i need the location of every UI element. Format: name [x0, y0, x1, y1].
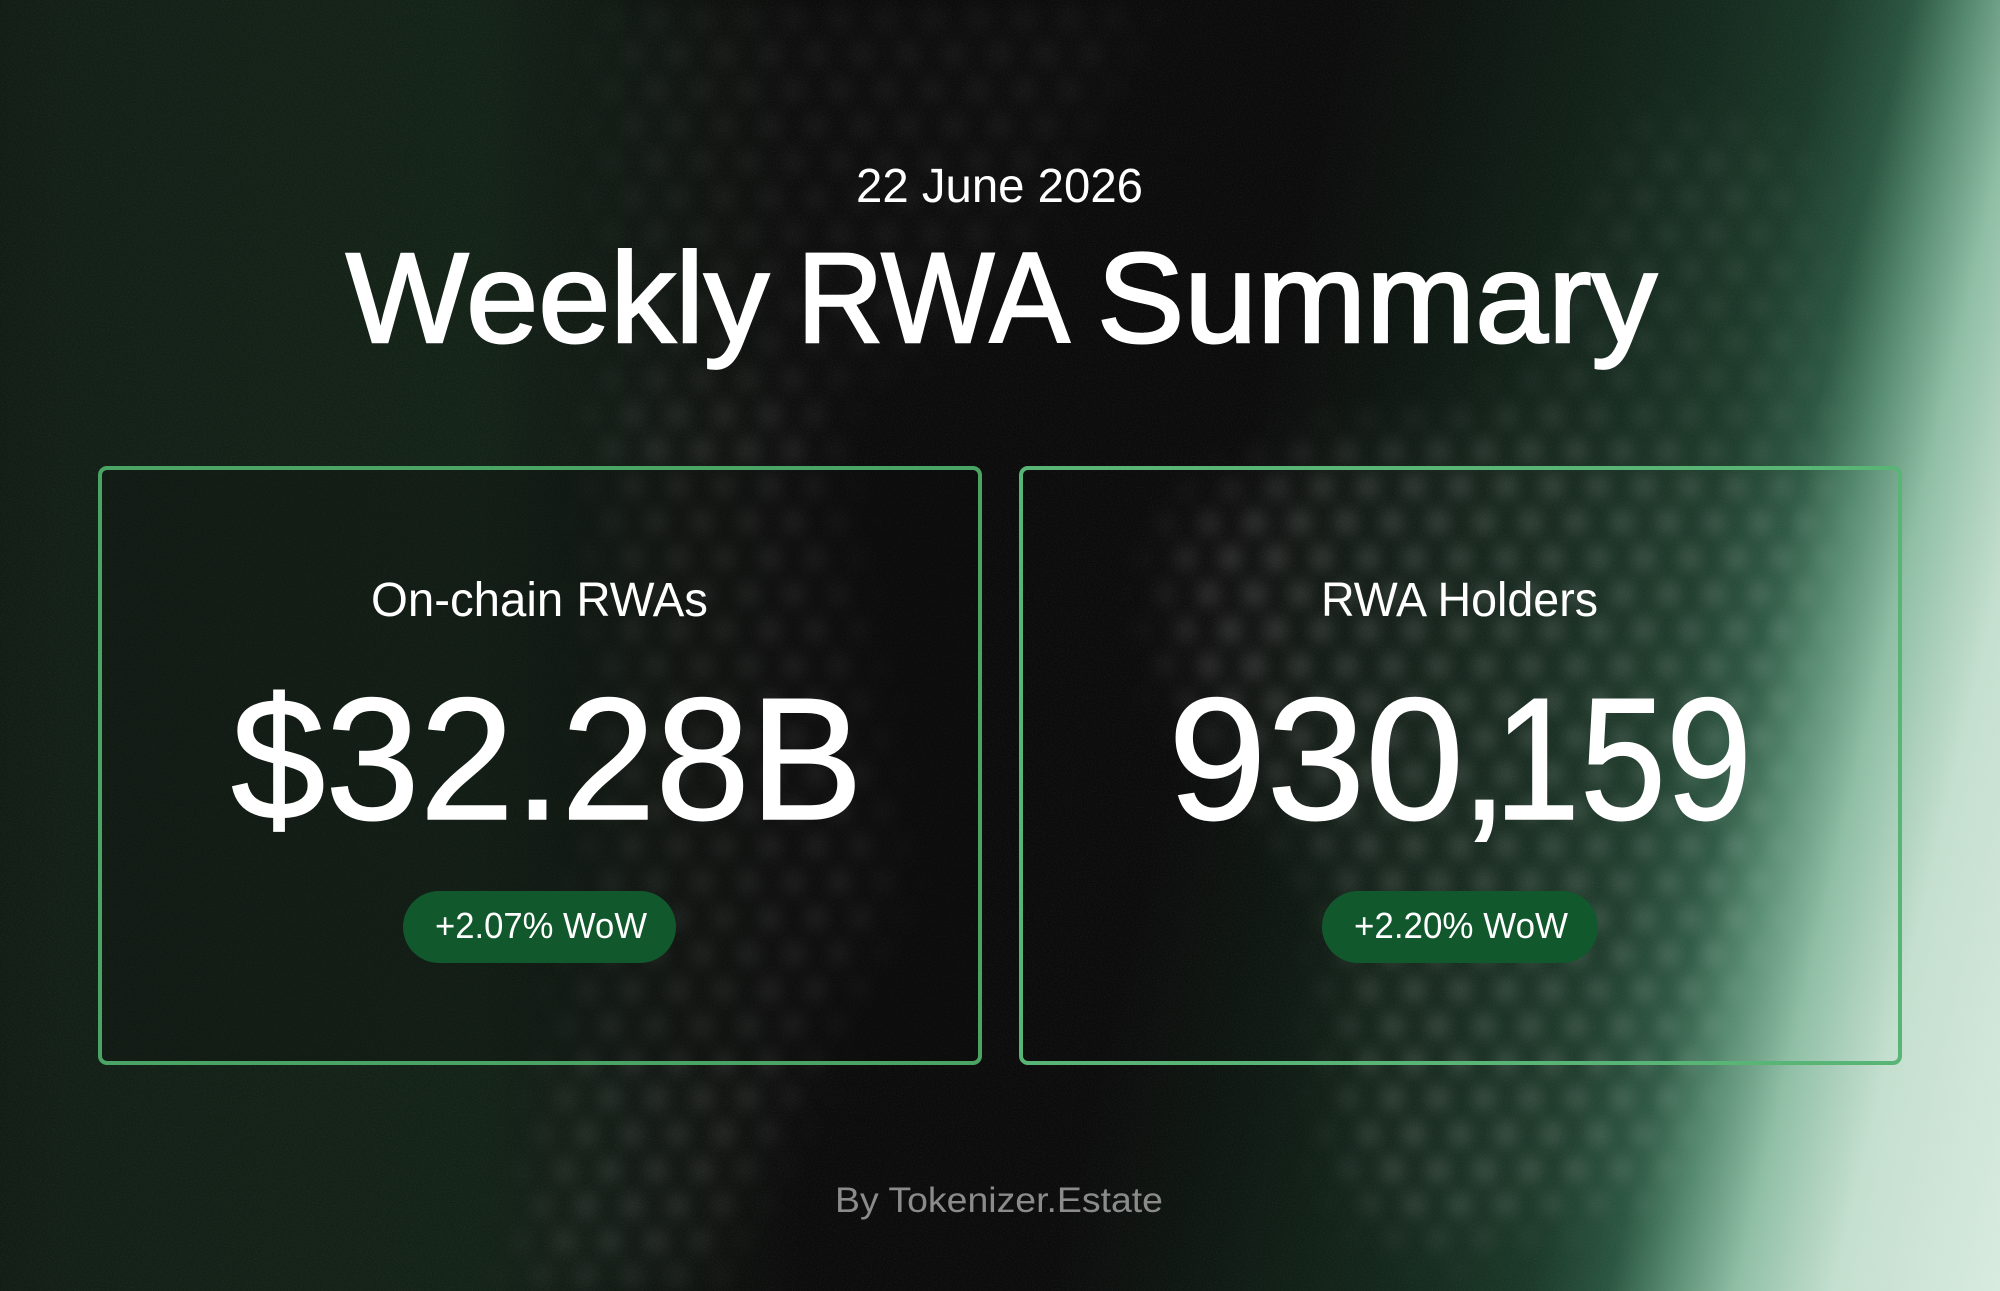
panel: RWA holders [1021, 468, 1900, 1063]
title: Summary [1097, 227, 1657, 370]
title: RWA [797, 227, 1070, 370]
RWA holders value: , [1460, 661, 1508, 856]
change pill: RWA holders [1322, 891, 1598, 963]
date: 22 June 2026 [856, 160, 1143, 213]
RWA holders label: RWA Holders [1321, 574, 1598, 627]
change pill: RWA holders: +2.20% WoW [1354, 905, 1568, 946]
RWA holders value: 930 [1168, 661, 1464, 856]
RWA holders value: 159 [1494, 661, 1752, 856]
on-chain RWAs value: $32.28B [231, 661, 863, 856]
on-chain RWAs label: On-chain RWAs [371, 574, 708, 627]
title: Weekly [346, 227, 769, 370]
panel: on-chain RWAs [100, 468, 980, 1063]
change pill: on-chain RWAs: +2.07% WoW [435, 905, 647, 946]
change pill: on-chain RWAs [403, 891, 676, 963]
footer attribution: By Tokenizer.Estate [835, 1181, 1163, 1220]
